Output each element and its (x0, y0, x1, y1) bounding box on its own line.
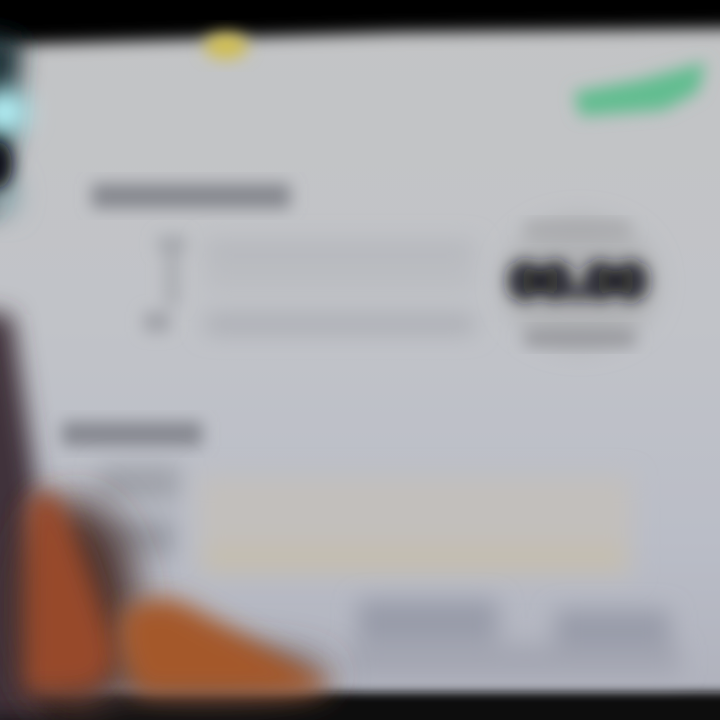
yellow clip (204, 33, 248, 59)
heading two (62, 422, 202, 446)
figure caption bottom (525, 330, 635, 346)
circle around figure (502, 217, 658, 349)
bottom dark band (0, 692, 720, 720)
wrist on left edge (0, 310, 50, 720)
upper data rows (205, 242, 475, 332)
bottom text columns (350, 600, 680, 675)
finger one (24, 491, 116, 692)
hand shadow (13, 500, 330, 720)
vertical scale of upper chart (144, 236, 186, 332)
heading one (92, 184, 290, 208)
left dark edge (0, 30, 22, 215)
finger two (119, 598, 332, 694)
large figure: 00.00 (510, 255, 646, 307)
green logo (574, 62, 706, 116)
beige box (198, 476, 632, 576)
figure caption top (525, 222, 630, 236)
dark object at left edge (0, 141, 12, 189)
teal light at left edge (0, 88, 30, 217)
lower left labels (100, 466, 180, 556)
top dark band (0, 0, 720, 50)
